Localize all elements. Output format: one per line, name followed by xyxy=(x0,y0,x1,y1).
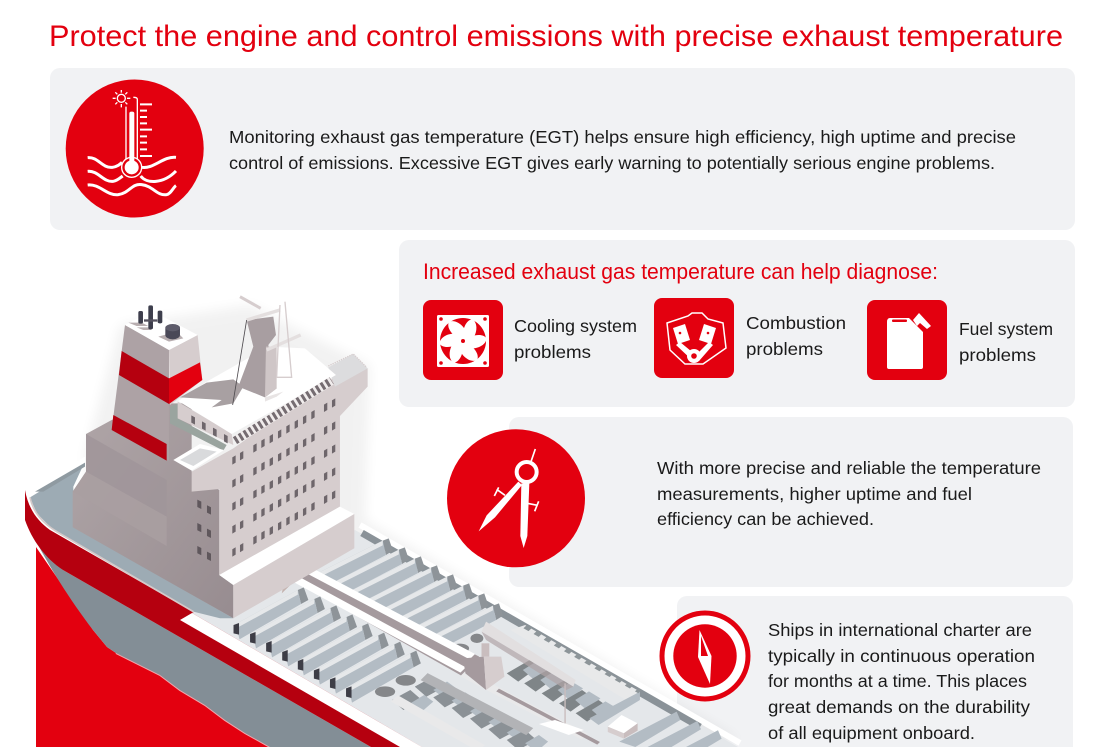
hatch covers xyxy=(375,634,483,697)
roof shadow xyxy=(180,379,243,407)
hull: grey band xyxy=(33,535,371,747)
text: fuel xyxy=(959,319,1053,365)
panel: durability xyxy=(662,596,1073,747)
forward deck detail ribs xyxy=(392,660,617,747)
bridge facade xyxy=(192,368,368,575)
panel: diagnose xyxy=(399,240,1075,407)
text: cooling: Cooling system xyxy=(514,316,637,336)
aft deck xyxy=(25,457,233,618)
text: durability: typically in continuous operation xyxy=(768,646,1035,666)
main wall xyxy=(73,403,233,618)
heading: diagnose: Increased exhaust gas temperature can help diagnose: xyxy=(423,259,938,284)
text: fuel: Fuel system xyxy=(959,319,1053,339)
text: fuel: problems xyxy=(959,345,1036,365)
funnel xyxy=(112,305,202,461)
main deck xyxy=(180,525,740,747)
text: precision xyxy=(657,458,1041,529)
icon: dividers xyxy=(447,429,585,567)
funnel exhaust pipes xyxy=(138,305,162,329)
side windows xyxy=(197,500,211,561)
platform xyxy=(219,507,354,618)
railing xyxy=(328,354,367,367)
bridge roof xyxy=(170,347,336,471)
text: intro paragraph xyxy=(229,127,1016,173)
panel: precision xyxy=(447,417,1073,587)
railing posts xyxy=(525,627,640,692)
text: intro paragraph: control of emissions. Excessive EGT gives early warning to potentially serious engine problems. xyxy=(229,153,995,173)
text: durability: of all equipment onboard. xyxy=(768,723,975,743)
crane tower xyxy=(463,622,640,735)
text: cooling xyxy=(514,316,637,362)
panel: intro xyxy=(50,68,1075,230)
text: precision: measurements, higher uptime and fuel xyxy=(657,484,972,504)
text: durability: Ships in international charter are xyxy=(768,620,1032,640)
text: precision: With more precise and reliable the temperature xyxy=(657,458,1041,478)
title: Protect the engine and control emissions with precise exhaust temperature xyxy=(49,20,1063,53)
wing balcony xyxy=(328,354,368,387)
superstructure xyxy=(25,297,368,618)
illustration: tanker ship xyxy=(25,297,740,747)
text: durability: great demands on the durability xyxy=(768,697,1030,717)
icon: cooling fan xyxy=(423,300,503,380)
icon: thermometer in water xyxy=(66,80,204,218)
text: combustion: problems xyxy=(746,339,823,359)
icon: compass xyxy=(662,613,748,699)
icon: combustion pistons xyxy=(654,298,734,378)
deck ribs: port row xyxy=(321,538,503,652)
hull: dark red band xyxy=(25,490,422,747)
icon: fuel can xyxy=(867,300,947,380)
deck ribs: starboard row xyxy=(234,587,421,703)
text: intro paragraph: Monitoring exhaust gas temperature (EGT) helps ensure high efficiency, high uptime and precise xyxy=(229,127,1016,147)
lower tier face xyxy=(73,472,167,546)
hull: lower red xyxy=(36,547,270,747)
facade windows xyxy=(232,398,335,557)
text: combustion xyxy=(746,313,846,359)
text: cooling: problems xyxy=(514,342,591,362)
text: precision: efficiency can be achieved. xyxy=(657,509,874,529)
mast xyxy=(233,297,301,405)
text: durability xyxy=(768,620,1035,743)
text: combustion: Combustion xyxy=(746,313,846,333)
catwalk xyxy=(282,563,599,747)
deck box xyxy=(608,715,638,739)
text: durability: for months at a time. This places xyxy=(768,671,1027,691)
tier faces xyxy=(86,434,167,517)
hull: waterline foam xyxy=(116,653,270,747)
